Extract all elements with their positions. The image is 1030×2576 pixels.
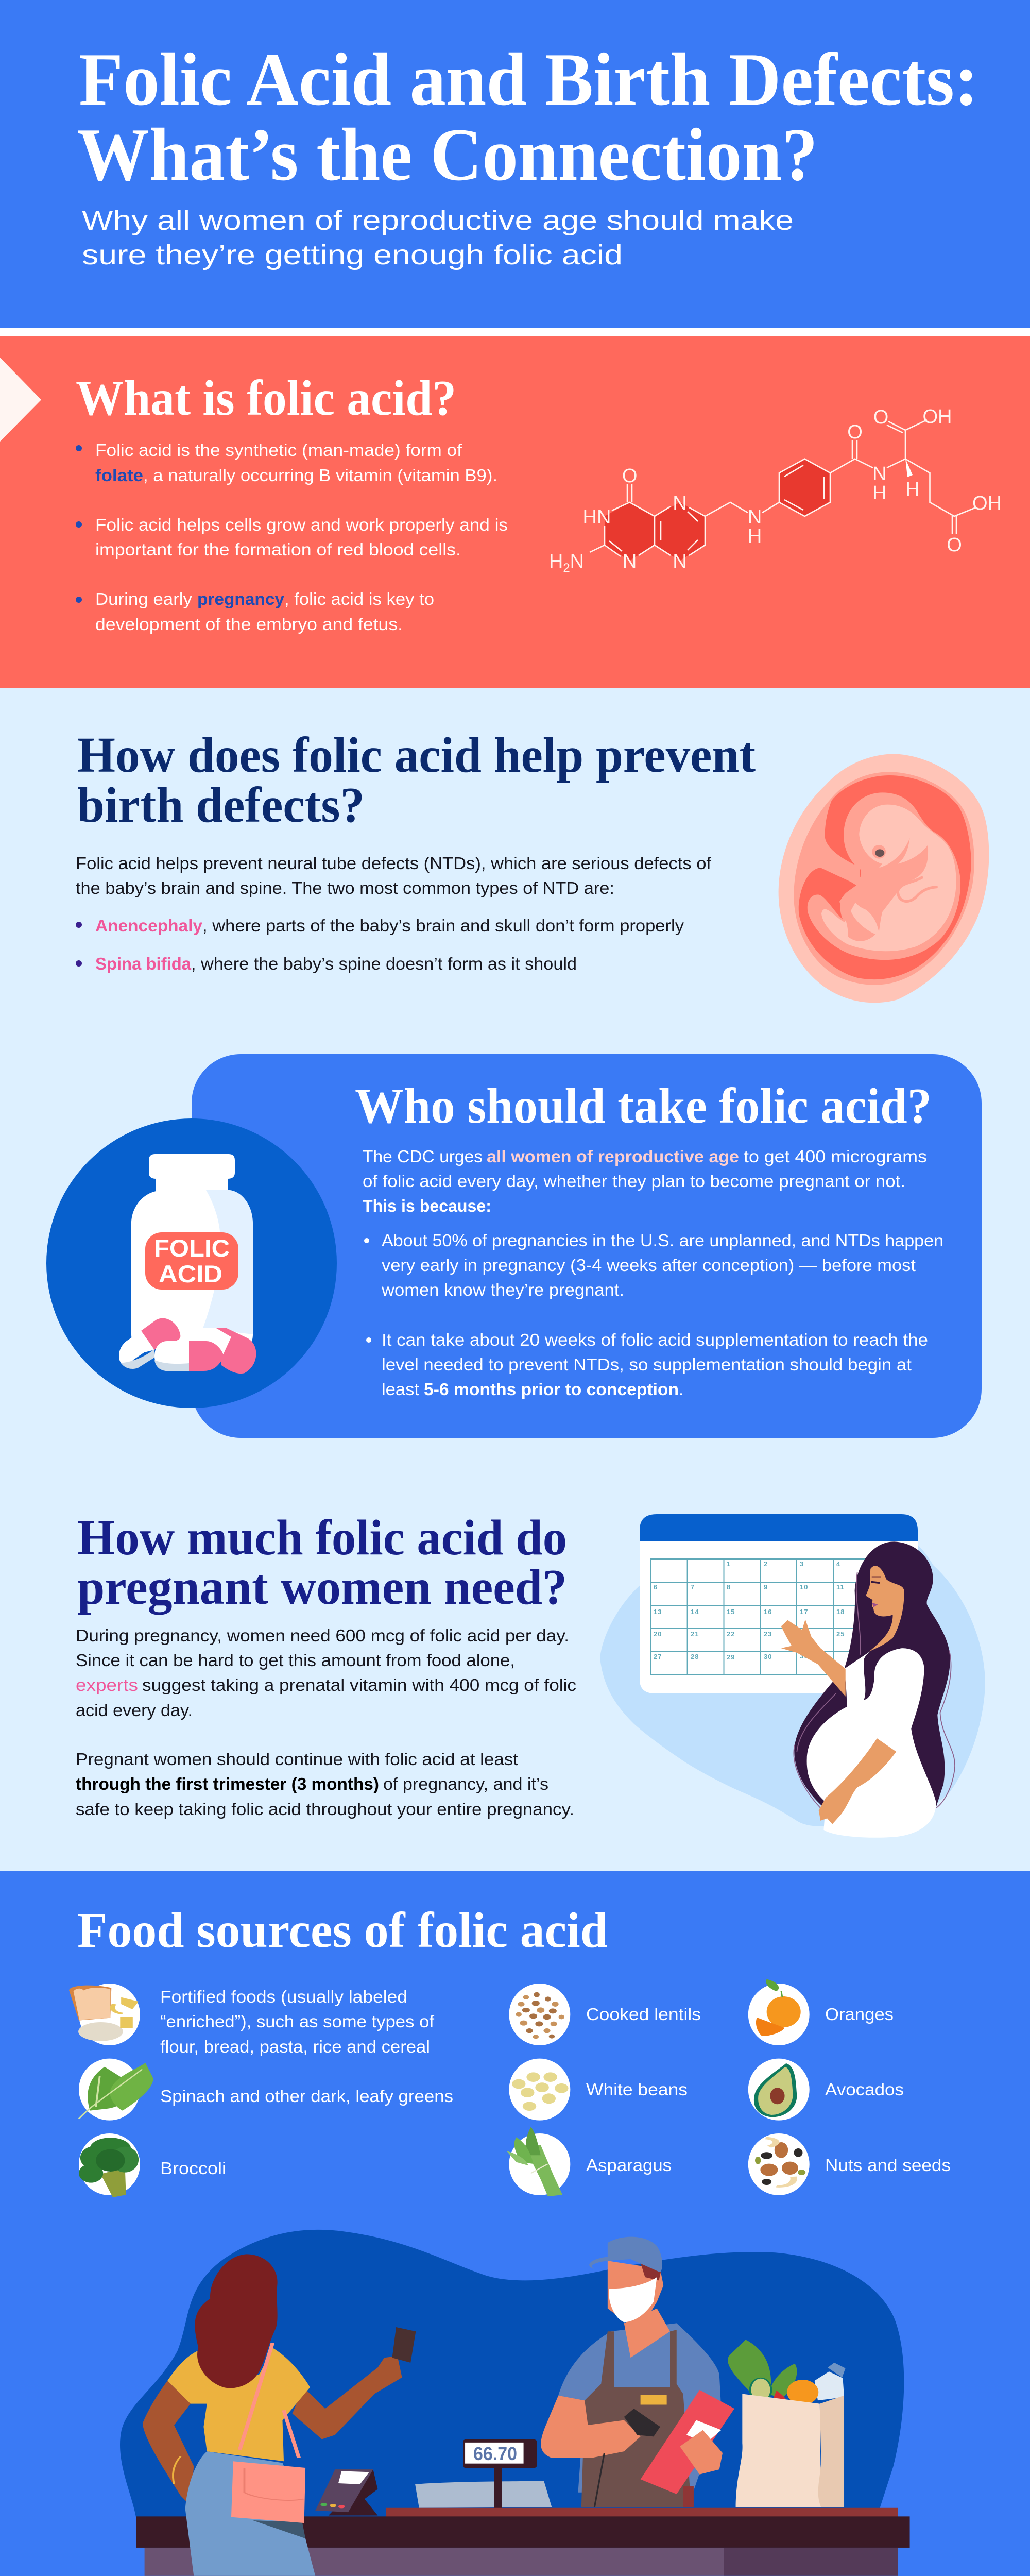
icon: white beans: [512, 2072, 569, 2111]
calendar: [640, 1514, 918, 1693]
panel: who should take folic acid: [46, 1054, 982, 1438]
molecule diagram: [549, 406, 1002, 575]
molecule diagram: 2: [563, 561, 570, 575]
calendar: 3: [800, 1560, 804, 1568]
food labels: Cooked lentils: [586, 2005, 701, 2024]
calendar: 8: [727, 1583, 731, 1591]
icon: lentils: [516, 1992, 564, 2039]
calendar: 15: [727, 1608, 735, 1616]
calendar: 11: [836, 1583, 845, 1591]
calendar: 27: [654, 1653, 662, 1660]
calendar: 2: [764, 1560, 768, 1568]
CDC text: of folic acid every day, whether they plan to become pregnant or not.: [363, 1172, 905, 1191]
calendar: 29: [727, 1653, 735, 1661]
panel: what is folic acid: [0, 336, 1030, 688]
icon: folic acid bottle: ACID: [159, 1260, 222, 1287]
calendar: 31: [800, 1652, 808, 1660]
molecule diagram: N: [673, 493, 687, 514]
reasons bullets: [364, 1231, 943, 1399]
bullet list: development of the embryo and fetus.: [95, 615, 403, 634]
customer: [143, 2254, 416, 2576]
panel: light blue background: [0, 688, 1030, 1871]
dosage text: safe to keep taking folic acid throughout your entire pregnancy.: [76, 1800, 574, 1819]
calendar: 20: [654, 1630, 662, 1638]
food labels: White beans: [586, 2080, 688, 2099]
calendar: 13: [654, 1608, 662, 1616]
heading: who should take: Who should take folic acid?: [355, 1078, 932, 1134]
calendar: 4: [836, 1560, 840, 1568]
icon: fortified foods: [69, 1986, 139, 2041]
dosage text: During pregnancy, women need 600 mcg of folic acid per day.: [76, 1626, 569, 1645]
heading: how does folic acid help: How does folic acid help prevent: [77, 727, 756, 783]
calendar: 10: [800, 1583, 808, 1591]
reasons bullets: level needed to prevent NTDs, so supplementation should begin at: [382, 1355, 912, 1374]
intro text: [76, 854, 712, 897]
icon: pregnant woman: [781, 1541, 955, 1838]
molecule diagram: N: [673, 551, 687, 572]
calendar: 21: [691, 1630, 699, 1638]
scene backdrop: [120, 2230, 904, 2517]
food labels: Nuts and seeds: [825, 2156, 951, 2175]
bullet list: , a naturally occurring B vitamin (vitamin B9).: [143, 466, 497, 485]
icon: blob background: [600, 1525, 985, 1827]
dosage text: of pregnancy, and it’s: [383, 1774, 548, 1793]
panel: how much folic acid: [76, 1510, 985, 1838]
CDC text: to get 400 micrograms: [744, 1147, 927, 1166]
molecule diagram: O: [622, 465, 637, 487]
counter: [136, 2508, 910, 2576]
NTD bullets: [76, 916, 684, 973]
icon: embryo: [779, 754, 989, 1003]
CDC text: This is because:: [363, 1196, 491, 1215]
register: [415, 2481, 552, 2508]
bullet list: During early: [95, 589, 193, 608]
calendar: 6: [654, 1583, 658, 1591]
panel: food sources: [0, 1871, 1030, 2576]
NTD bullets: , where the baby’s spine doesn’t form as it should: [191, 954, 577, 973]
molecule diagram: N: [570, 551, 584, 572]
bullet list: Folic acid helps cells grow and work properly and is: [95, 515, 508, 534]
calendar: 14: [691, 1608, 699, 1616]
food labels: Broccoli: [160, 2159, 226, 2178]
dosage text: Since it can be hard to get this amount from food alone,: [76, 1651, 515, 1670]
bullet list: , folic acid is key to: [284, 589, 434, 608]
molecule diagram: N: [623, 551, 637, 572]
molecule diagram: N: [872, 463, 887, 485]
CDC text: [363, 1147, 927, 1215]
price label: 66.70: [473, 2443, 517, 2464]
dosage text: Pregnant women should continue with folic acid at least: [76, 1750, 518, 1769]
food icons: [69, 1979, 810, 2197]
reasons bullets: It can take about 20 weeks of folic acid supplementation to reach the: [382, 1330, 928, 1349]
calendar: 16: [764, 1608, 772, 1616]
panel: header: [0, 0, 1030, 328]
bullet list: Folic acid is the synthetic (man-made) form of: [95, 440, 462, 460]
food labels: Oranges: [825, 2005, 894, 2024]
heading: how does folic acid help: birth defects?: [77, 777, 365, 833]
NTD bullets: Anencephaly: [95, 916, 203, 935]
title: What’s the Connection?: [77, 113, 818, 196]
molecule diagram: N: [748, 506, 762, 528]
food labels: Avocados: [825, 2080, 904, 2099]
food labels: Fortified foods (usually labeled: [160, 1987, 407, 2006]
heading: what is folic acid: What is folic acid?: [76, 370, 456, 426]
molecule diagram: O: [847, 421, 863, 443]
subtitle: sure they’re getting enough folic acid: [82, 240, 623, 270]
molecule diagram: H: [748, 526, 762, 547]
calendar: 7: [691, 1583, 695, 1591]
heading: how much: [77, 1510, 567, 1615]
calendar: 17: [800, 1608, 808, 1616]
molecule diagram: O: [873, 406, 888, 428]
title: Folic Acid and Birth Defects:: [79, 38, 978, 121]
calendar: 23: [764, 1630, 772, 1638]
icon: orange: [756, 1979, 801, 2036]
icon: spinach: [79, 2063, 153, 2119]
icon: asparagus: [507, 2127, 562, 2196]
icon: folic acid bottle: [46, 1118, 337, 1408]
molecule diagram: O: [947, 534, 962, 556]
reasons bullets: very early in pregnancy (3-4 weeks after conception) — before most: [382, 1256, 916, 1275]
food labels: Spinach and other dark, leafy greens: [160, 2087, 453, 2106]
food labels: “enriched”), such as some types of: [160, 2012, 435, 2031]
icon: avocado: [754, 2063, 797, 2117]
bullet list: pregnancy: [197, 589, 285, 608]
dosage text: [76, 1626, 576, 1819]
reasons bullets: 5-6 months prior to conception: [424, 1380, 679, 1399]
molecule diagram: OH: [972, 493, 1002, 514]
icon: folic acid bottle: FOLIC: [154, 1234, 230, 1262]
calendar: 28: [691, 1653, 699, 1660]
food labels: [160, 1987, 951, 2178]
intro text: the baby’s brain and spine. The two most common types of NTD are:: [76, 878, 614, 897]
food labels: Asparagus: [586, 2156, 672, 2175]
calendar: 18: [836, 1608, 845, 1616]
grocery bag: [728, 2340, 846, 2507]
reasons bullets: least: [382, 1380, 419, 1399]
dosage text: through the first trimester (3 months): [76, 1774, 379, 1793]
calendar: 25: [836, 1630, 845, 1638]
bullet list: folate: [95, 466, 143, 485]
molecule diagram: H: [872, 482, 887, 504]
NTD bullets: Spina bifida: [95, 954, 192, 973]
food labels: flour, bread, pasta, rice and cereal: [160, 2037, 430, 2056]
CDC text: all women of reproductive age: [487, 1147, 739, 1166]
dosage text: experts: [76, 1675, 138, 1694]
CDC text: The CDC urges: [363, 1147, 483, 1166]
calendar: 22: [727, 1630, 735, 1638]
heading: food sources: Food sources of folic acid: [77, 1903, 608, 1958]
cashier: [541, 2237, 734, 2507]
icon: nuts and seeds: [755, 2138, 805, 2187]
title: [77, 38, 978, 196]
panel: how does folic acid help: [76, 727, 989, 1003]
molecule diagram: H: [905, 479, 920, 500]
price display: [463, 2439, 537, 2508]
dosage text: acid every day.: [76, 1701, 193, 1720]
calendar: 9: [764, 1583, 768, 1591]
molecule diagram: H: [549, 551, 563, 572]
molecule diagram: HN: [583, 506, 611, 528]
intro text: Folic acid helps prevent neural tube defects (NTDs), which are serious defects of: [76, 854, 712, 873]
reasons bullets: .: [679, 1380, 683, 1399]
calendar: 1: [727, 1560, 731, 1568]
reasons bullets: women know they’re pregnant.: [381, 1280, 624, 1299]
heading: how does folic acid help: [77, 727, 756, 833]
arrow marker: [0, 358, 41, 442]
card terminal: [315, 2469, 377, 2515]
molecule diagram: OH: [923, 406, 952, 428]
reasons bullets: About 50% of pregnancies in the U.S. are unplanned, and NTDs happen: [382, 1231, 943, 1250]
bullet list: [76, 440, 508, 634]
illustration: checkout scene: [120, 2230, 910, 2576]
calendar: 30: [764, 1653, 772, 1660]
subtitle: [82, 205, 794, 270]
subtitle: Why all women of reproductive age should make: [82, 205, 794, 236]
dosage text: suggest taking a prenatal vitamin with 400 mcg of folic: [142, 1675, 576, 1694]
NTD bullets: , where parts of the baby’s brain and skull don’t form properly: [202, 916, 684, 935]
bullet list: important for the formation of red blood cells.: [95, 540, 461, 559]
heading: how much: How much folic acid do: [77, 1510, 567, 1566]
icon: broccoli: [79, 2138, 139, 2197]
heading: how much: pregnant women need?: [77, 1560, 567, 1615]
